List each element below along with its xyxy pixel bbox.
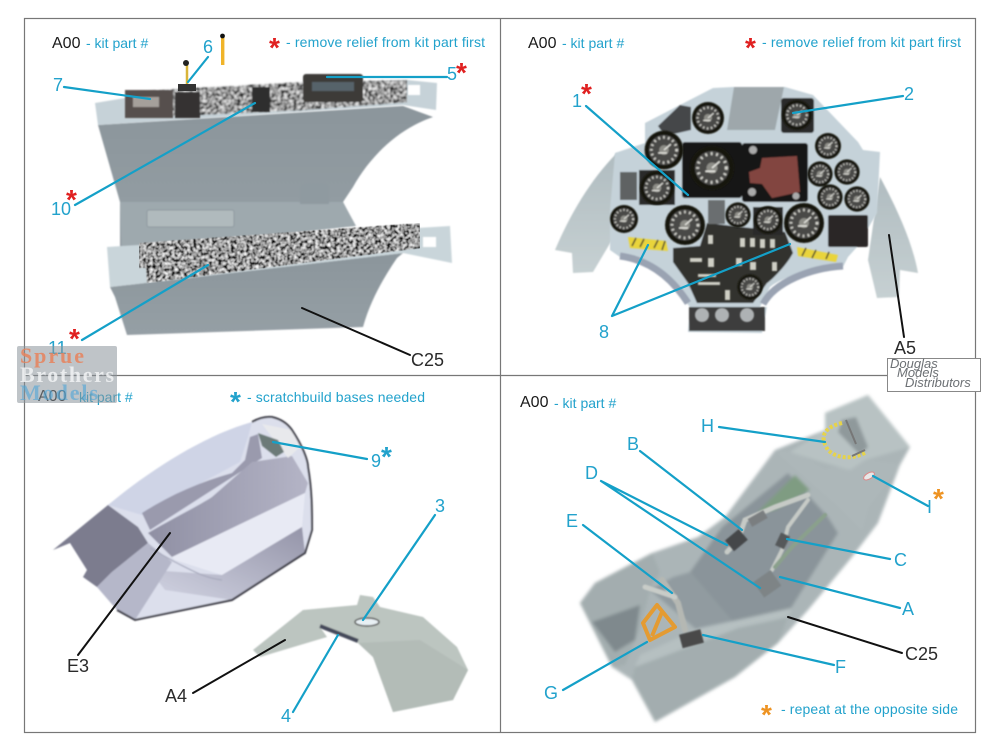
panel: instrument panel (528, 32, 961, 358)
part A4 (253, 595, 468, 712)
header: kit part (38, 388, 133, 405)
callout A4: A4 (165, 686, 187, 706)
callout G: G (544, 683, 558, 703)
callout 8 (599, 244, 790, 342)
callout C25 (302, 308, 444, 370)
callout 6: 6 (203, 37, 213, 57)
callout 5 (327, 57, 467, 88)
callout 5: 5 (447, 64, 457, 84)
callout 2: 2 (904, 84, 914, 104)
panel: side consoles (48, 32, 485, 370)
callout 1: * (581, 78, 592, 109)
callout F (703, 635, 846, 677)
note: remove relief: * (269, 32, 280, 63)
callout 1 (572, 78, 688, 195)
orange pull handle (643, 605, 675, 640)
watermark: Douglas Models Distributors: Distributors (905, 375, 971, 390)
callout 7 (53, 75, 150, 99)
callout 9: 9 (371, 451, 381, 471)
callout 5: * (456, 57, 467, 88)
note: repeat opposite (761, 699, 958, 730)
seat body (580, 395, 910, 722)
callout 11: * (69, 323, 80, 354)
yellow ring H (824, 420, 865, 457)
callout 11: 11 (48, 338, 67, 358)
callout E: E (566, 511, 578, 531)
callout 2 (793, 84, 914, 113)
callout 3 (363, 496, 445, 620)
callout 8: 8 (599, 322, 609, 342)
note: remove relief: - remove relief from kit part first (762, 34, 961, 50)
callout A: A (902, 599, 914, 619)
header: kit part: A00 (520, 394, 549, 411)
lower instrument strip (139, 223, 420, 283)
callout I (873, 476, 944, 517)
callout B: B (627, 434, 639, 454)
harness straps (645, 495, 825, 630)
callout H (701, 416, 825, 442)
watermark: Sprue Brothers Models: Models (20, 380, 98, 405)
note: scratchbuild bases (230, 386, 425, 417)
marking dot I (862, 470, 876, 482)
watermark: Sprue Brothers Models: Sprue (20, 343, 84, 368)
canopy E3 (53, 417, 312, 620)
side wings A5 (555, 153, 918, 298)
callout G (544, 642, 647, 703)
callout I: * (933, 483, 944, 514)
note: remove relief (745, 32, 961, 63)
note: remove relief: * (745, 32, 756, 63)
watermark: Douglas Models Distributors: Douglas (890, 356, 938, 371)
watermark: Douglas Models Distributors: Models (897, 365, 939, 380)
watermark: Sprue Brothers Models (17, 343, 117, 405)
callout 6 (188, 37, 213, 82)
callout A5 (889, 235, 916, 358)
callout D (585, 463, 760, 588)
header: kit part (52, 35, 148, 52)
console switches (690, 235, 777, 300)
callout 10: 10 (51, 199, 71, 219)
callout C: C (894, 550, 907, 570)
harness buckles (679, 510, 790, 648)
panel: canopy parts (38, 386, 468, 726)
header: kit part: A00 (528, 35, 557, 52)
callout E3 (67, 533, 170, 676)
callout H: H (701, 416, 714, 436)
callout 11 (48, 265, 208, 358)
callout 9 (273, 441, 392, 472)
header: kit part: A00 (38, 388, 67, 405)
header: kit part (528, 35, 624, 52)
header: kit part (520, 394, 616, 411)
header: kit part: - kit part # (86, 35, 148, 51)
callout 1: 1 (572, 91, 582, 111)
note: repeat opposite: - repeat at the opposite side (781, 701, 958, 717)
callout E (566, 511, 672, 593)
header: kit part: - kit part # (554, 395, 616, 411)
note: scratchbuild bases: - scratchbuild bases needed (247, 389, 425, 405)
note: repeat opposite: * (761, 699, 772, 730)
callout E3: E3 (67, 656, 89, 676)
callout F: F (835, 657, 846, 677)
callout C25 (788, 617, 938, 664)
callout 4: 4 (281, 706, 291, 726)
callout 7: 7 (53, 75, 63, 95)
callout 4 (281, 635, 338, 726)
callout A (780, 577, 914, 619)
note: remove relief: - remove relief from kit part first (286, 34, 485, 50)
upper instrument strip (125, 74, 407, 118)
header: kit part: kit part # (79, 389, 133, 405)
callout C (787, 539, 907, 570)
callout C25: C25 (411, 350, 444, 370)
callout 3: 3 (435, 496, 445, 516)
callout 10 (51, 103, 255, 219)
gauges (610, 100, 870, 322)
note: remove relief (269, 32, 485, 63)
side console resin part (95, 80, 452, 335)
watermark: Sprue Brothers Models: Brothers (20, 362, 114, 387)
header: kit part: - kit part # (562, 35, 624, 51)
panel: ejection seat (520, 394, 958, 730)
callout D: D (585, 463, 598, 483)
header: kit part: A00 (52, 35, 81, 52)
callout 10: * (66, 184, 77, 215)
callout I: I (927, 497, 932, 517)
yellow pin (220, 34, 225, 65)
instrument face (610, 87, 880, 333)
callout 9: * (381, 441, 392, 472)
callout A5: A5 (894, 338, 916, 358)
part 6 small lever (178, 60, 196, 91)
note: scratchbuild bases: * (230, 386, 241, 417)
yellow placards (628, 237, 838, 262)
callout B (627, 434, 742, 530)
callout A4 (165, 640, 285, 706)
watermark: Douglas Models Distributors (888, 356, 980, 392)
callout C25: C25 (905, 644, 938, 664)
